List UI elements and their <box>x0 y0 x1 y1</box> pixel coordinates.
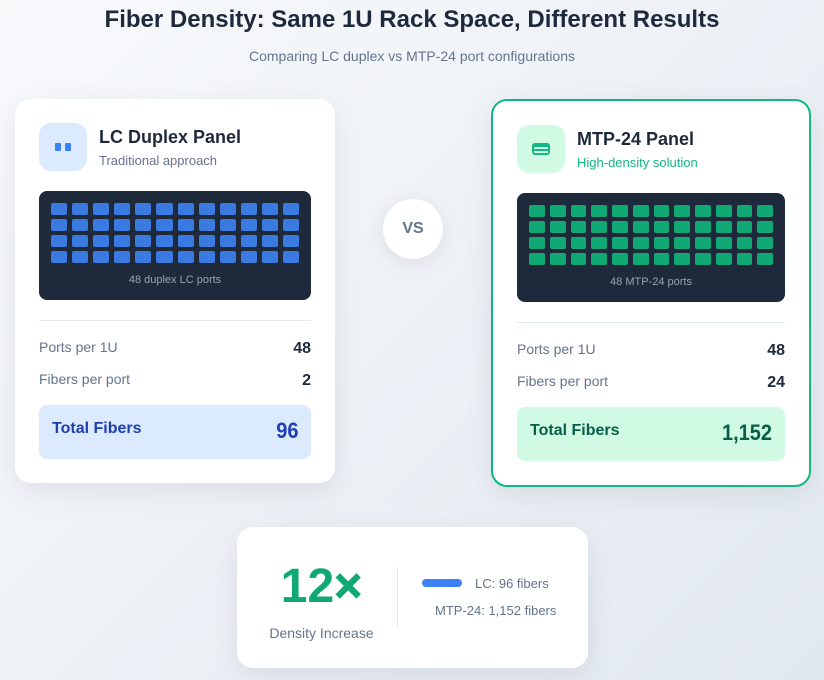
subtitle: Comparing LC duplex vs MTP-24 port configurations <box>249 48 575 64</box>
icon: LC duplex connector <box>39 123 87 171</box>
MTP spec: ports value: 48 <box>767 342 785 359</box>
panel: LC duplex <box>15 99 335 483</box>
MTP spec: fibers value: 24 <box>767 374 785 391</box>
LC spec: ports value: 48 <box>293 340 311 357</box>
MTP total value: 1,152 <box>722 420 772 445</box>
LC rack caption: 48 duplex LC ports <box>129 274 221 286</box>
MTP spec: fibers label: Fibers per port <box>517 373 608 389</box>
MTP total fibers <box>517 407 785 461</box>
LC comparison bar <box>422 579 462 587</box>
MTP rack visual <box>517 193 785 302</box>
summary divider <box>397 567 398 627</box>
VS badge <box>383 199 443 259</box>
LC panel subheading: Traditional approach <box>99 153 217 168</box>
MTP total label: Total Fibers <box>530 422 620 439</box>
MTP panel subheading: High-density solution <box>577 155 698 170</box>
icon: MTP connector <box>517 125 565 173</box>
MTP panel heading: MTP-24 Panel <box>577 129 694 149</box>
panel: MTP-24 <box>491 99 811 487</box>
LC rack visual <box>39 191 311 300</box>
MTP port grid <box>529 205 773 265</box>
VS badge: VS <box>402 220 424 237</box>
LC spec: fibers value: 2 <box>302 372 311 389</box>
title: Fiber Density: Same 1U Rack Space, Different Results <box>105 6 719 33</box>
LC total label: Total Fibers <box>52 420 142 437</box>
panel: density summary <box>237 527 588 668</box>
LC comparison label: LC: 96 fibers <box>475 576 549 591</box>
LC spec: fibers label: Fibers per port <box>39 371 130 387</box>
MTP specs divider <box>517 322 785 323</box>
LC spec: ports label: Ports per 1U <box>39 339 118 355</box>
LC specs divider <box>39 320 311 321</box>
LC total fibers <box>39 405 311 459</box>
MTP comparison label: MTP-24: 1,152 fibers <box>435 603 556 618</box>
LC port grid <box>51 203 299 263</box>
density label: Density Increase <box>269 625 374 641</box>
density multiplier: 12× <box>281 560 362 613</box>
MTP rack caption: 48 MTP-24 ports <box>610 276 692 288</box>
LC total value: 96 <box>276 418 298 443</box>
LC panel heading: LC Duplex Panel <box>99 127 241 147</box>
MTP spec: ports label: Ports per 1U <box>517 341 596 357</box>
